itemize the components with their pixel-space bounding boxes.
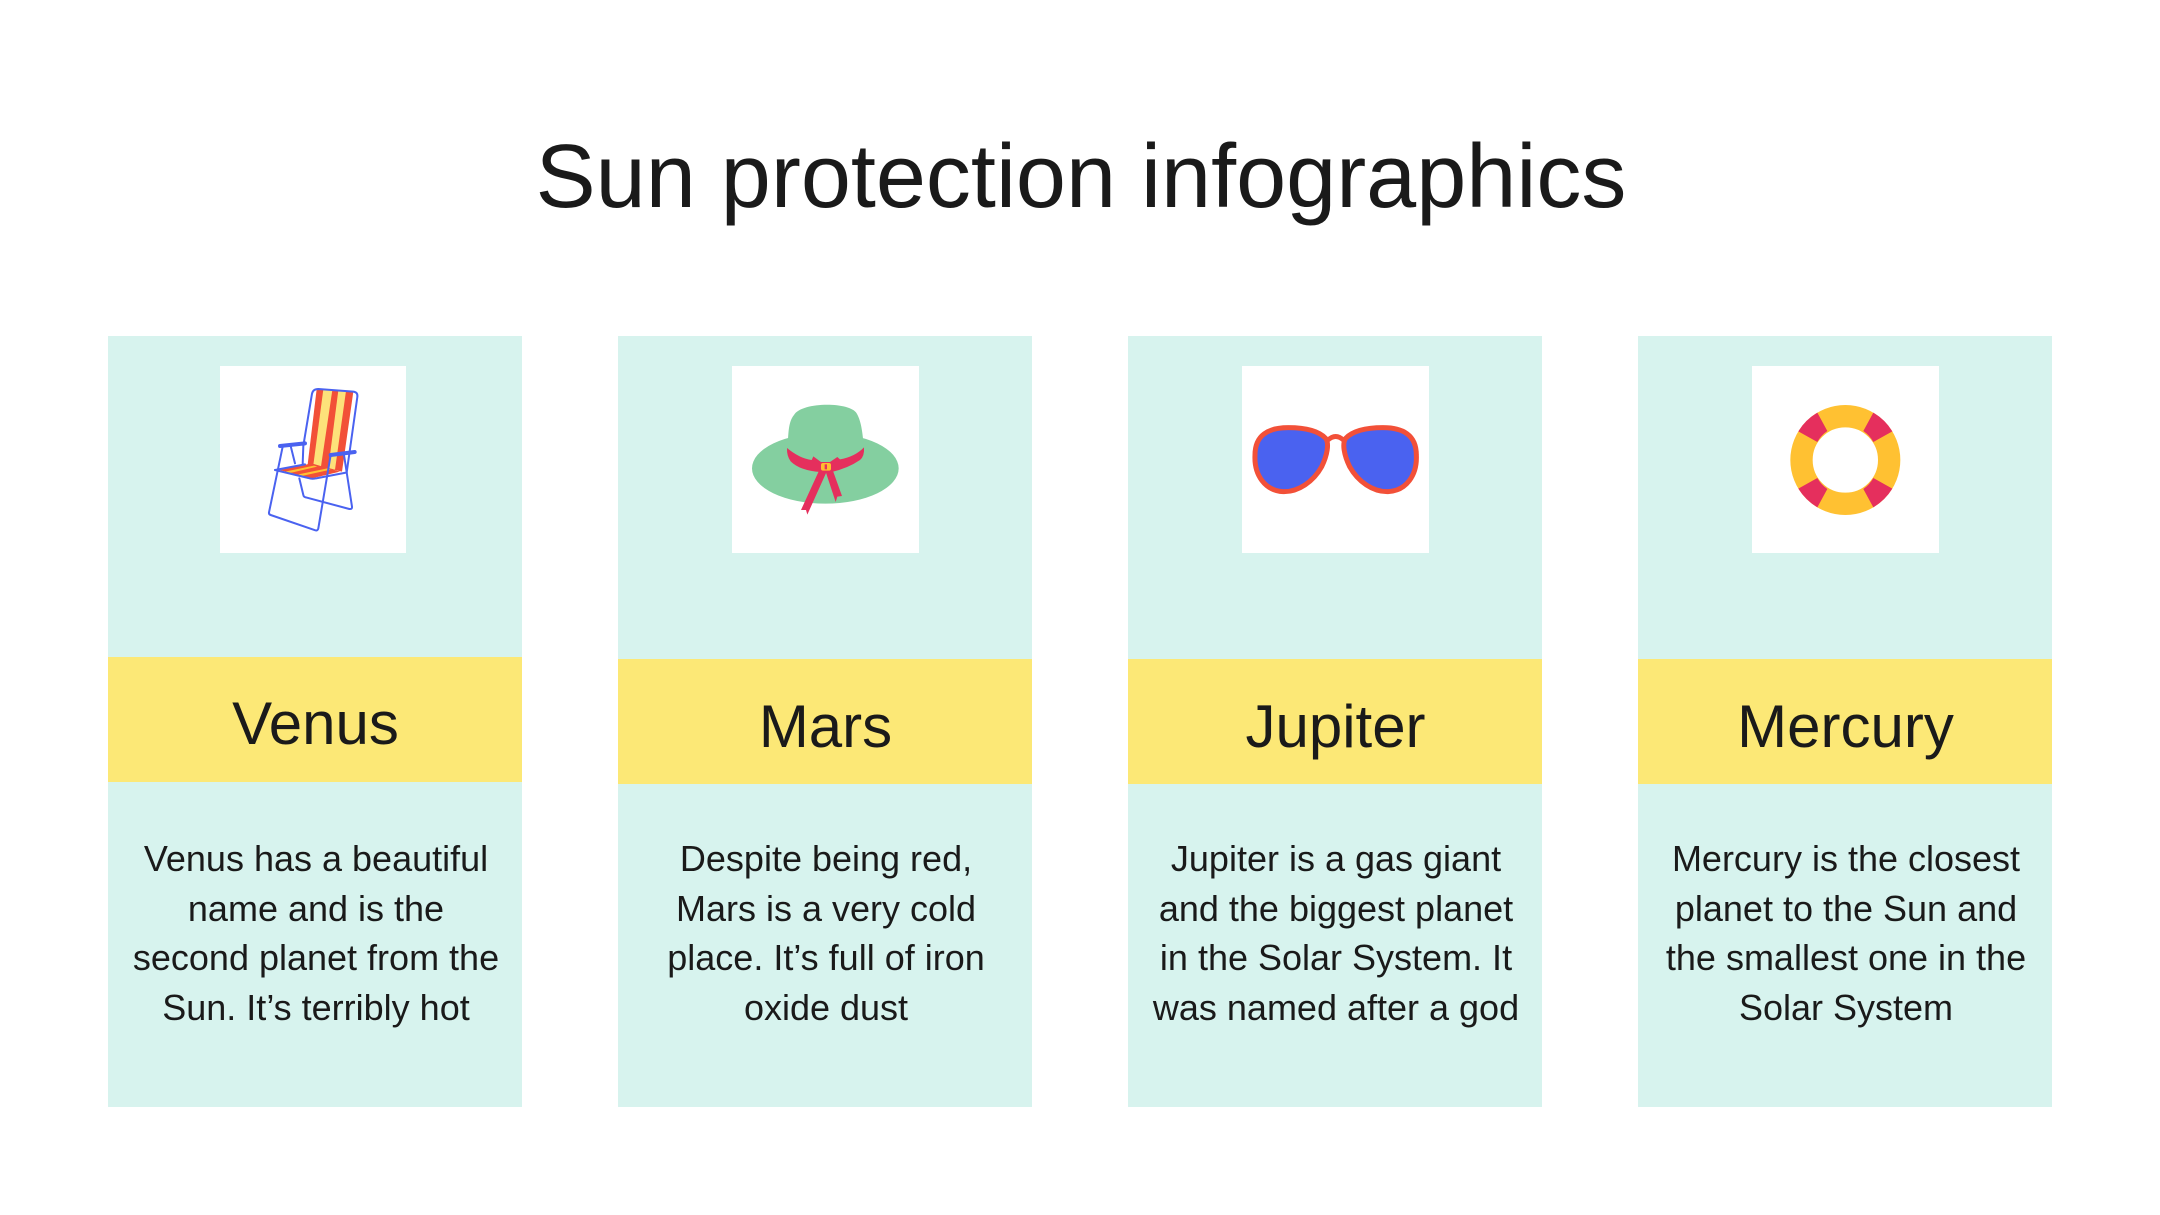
text: Jupiter description: in the Solar System. It [1160,937,1512,978]
heading band: Mercury [1638,659,2052,784]
icon: beach chair [220,366,406,553]
heading band: Venus: Venus [232,690,399,757]
panel: Mercury [1638,336,2052,1107]
heading band: Mercury: Mercury [1737,693,1954,760]
icon: sunglasses [1242,366,1429,553]
icon: life ring [1752,366,1939,553]
title: Sun protection infographics [536,127,1626,227]
heading band: Mars: Mars [759,693,892,760]
text: Mercury description: the smallest one in the [1666,937,2026,978]
heading band: Mars [618,659,1032,784]
text: Venus description: name and is the [188,888,444,929]
text: Mars description [667,838,985,1028]
text: Mercury description: planet to the Sun and [1675,888,2017,929]
text: Venus description: second planet from the [133,937,499,978]
text: Jupiter description: and the biggest planet [1159,888,1513,929]
panel: Jupiter [1128,336,1542,1107]
text: Mars description: Despite being red, [680,838,972,879]
text: Venus description [133,838,499,1028]
text: Mercury description: Solar System [1739,987,1953,1028]
heading band: Venus [108,657,522,782]
text: Mars description: place. It’s full of iron [667,937,985,978]
text: Mercury description: Mercury is the closest [1672,838,2020,879]
text: Venus description: Venus has a beautiful [144,838,488,879]
text: Jupiter description: was named after a god [1153,987,1519,1028]
panel: Venus [108,336,522,1107]
panel: Mars [618,336,1032,1107]
heading band: Jupiter: Jupiter [1245,693,1426,760]
text: Mercury description [1666,838,2026,1028]
text: Jupiter description: Jupiter is a gas giant [1171,838,1501,879]
text: Mars description: Mars is a very cold [676,888,976,929]
heading band: Jupiter [1128,659,1542,784]
icon: sun hat [732,366,919,553]
text: Venus description: Sun. It’s terribly hot [162,987,470,1028]
text: Mars description: oxide dust [744,987,908,1028]
text: Jupiter description [1152,838,1519,1028]
